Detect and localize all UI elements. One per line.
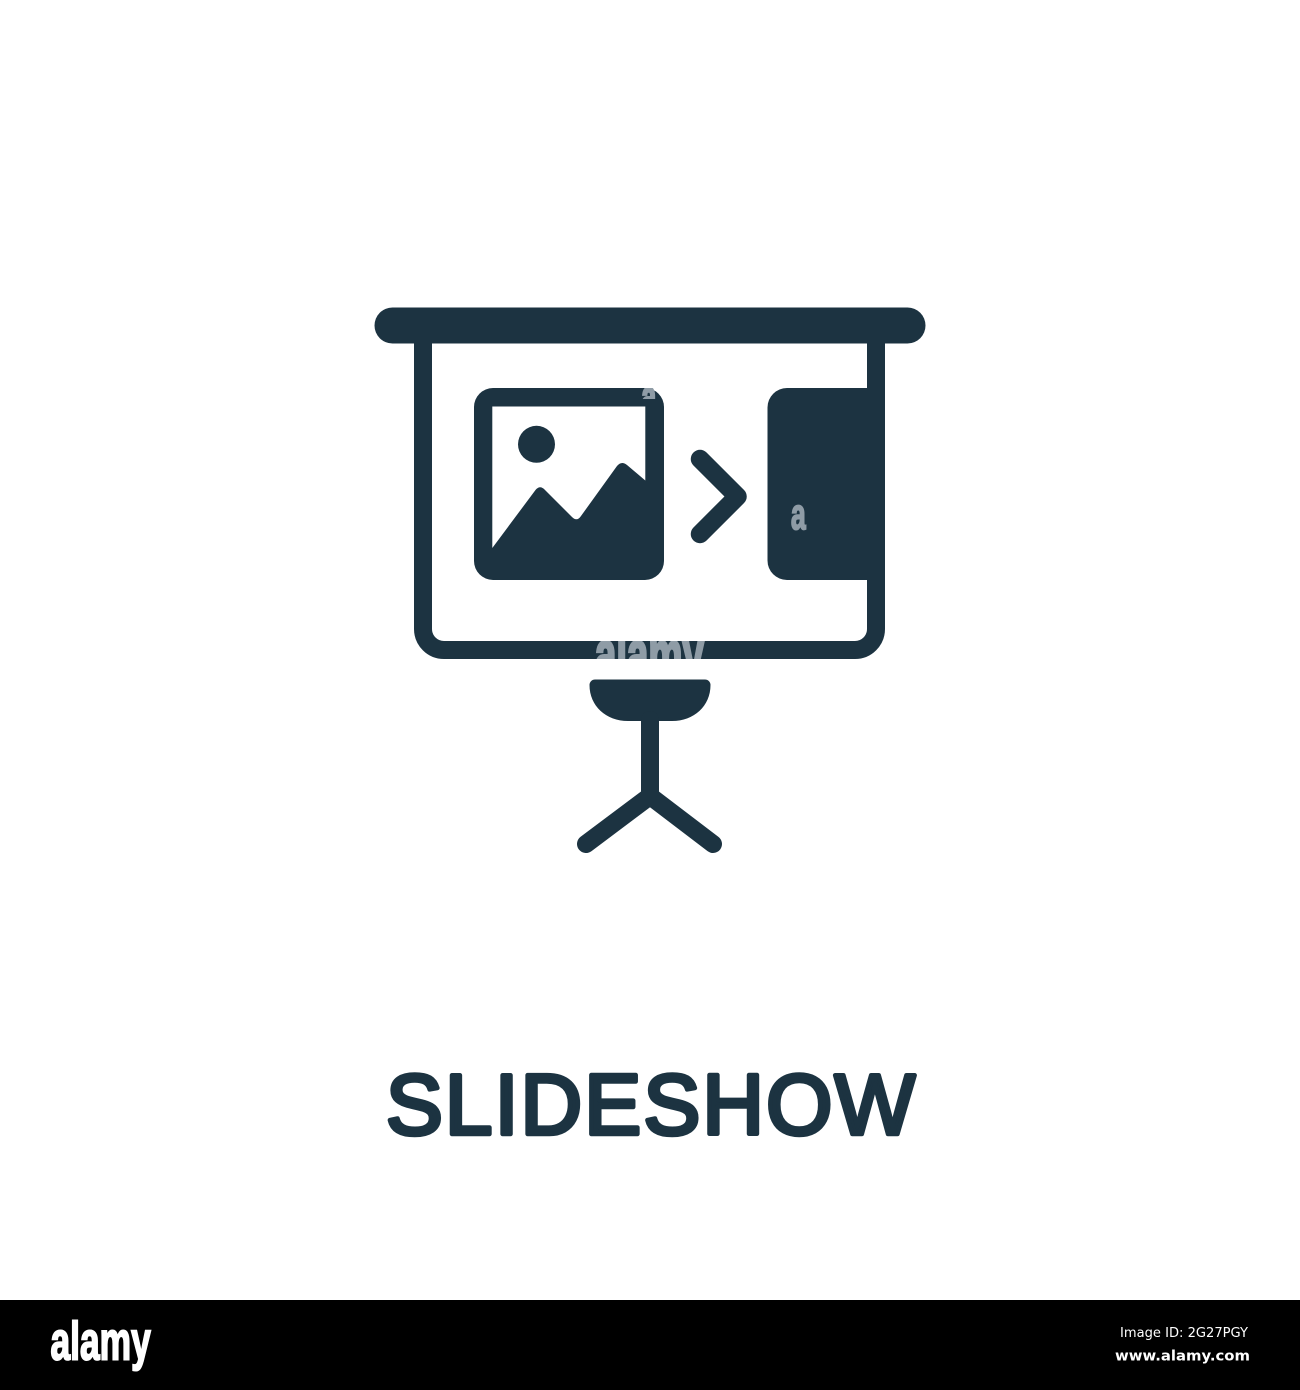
watermark on screen bottom edge: alamy — [595, 619, 704, 691]
top bar of screen — [374, 308, 926, 344]
image thumbnail — [474, 388, 664, 580]
arrow chevron — [700, 459, 738, 534]
screen frame — [423, 343, 876, 650]
title: SLIDESHOW — [386, 1058, 915, 1153]
stand bowl — [590, 680, 710, 721]
watermark fragment on thumbnail corner: a — [642, 371, 657, 421]
watermark fragments — [596, 388, 806, 659]
image id: Image ID: 2G27PGY — [1120, 1325, 1249, 1341]
stand legs — [586, 720, 713, 844]
next slide block — [768, 388, 885, 580]
watermark letter on next slide block: a — [791, 489, 806, 539]
website url: www.alamy.com — [1115, 1348, 1250, 1364]
alamy logo: alamy — [50, 1311, 151, 1371]
icon: slideshow projector screen — [374, 308, 926, 844]
footer bar — [0, 1300, 1300, 1390]
